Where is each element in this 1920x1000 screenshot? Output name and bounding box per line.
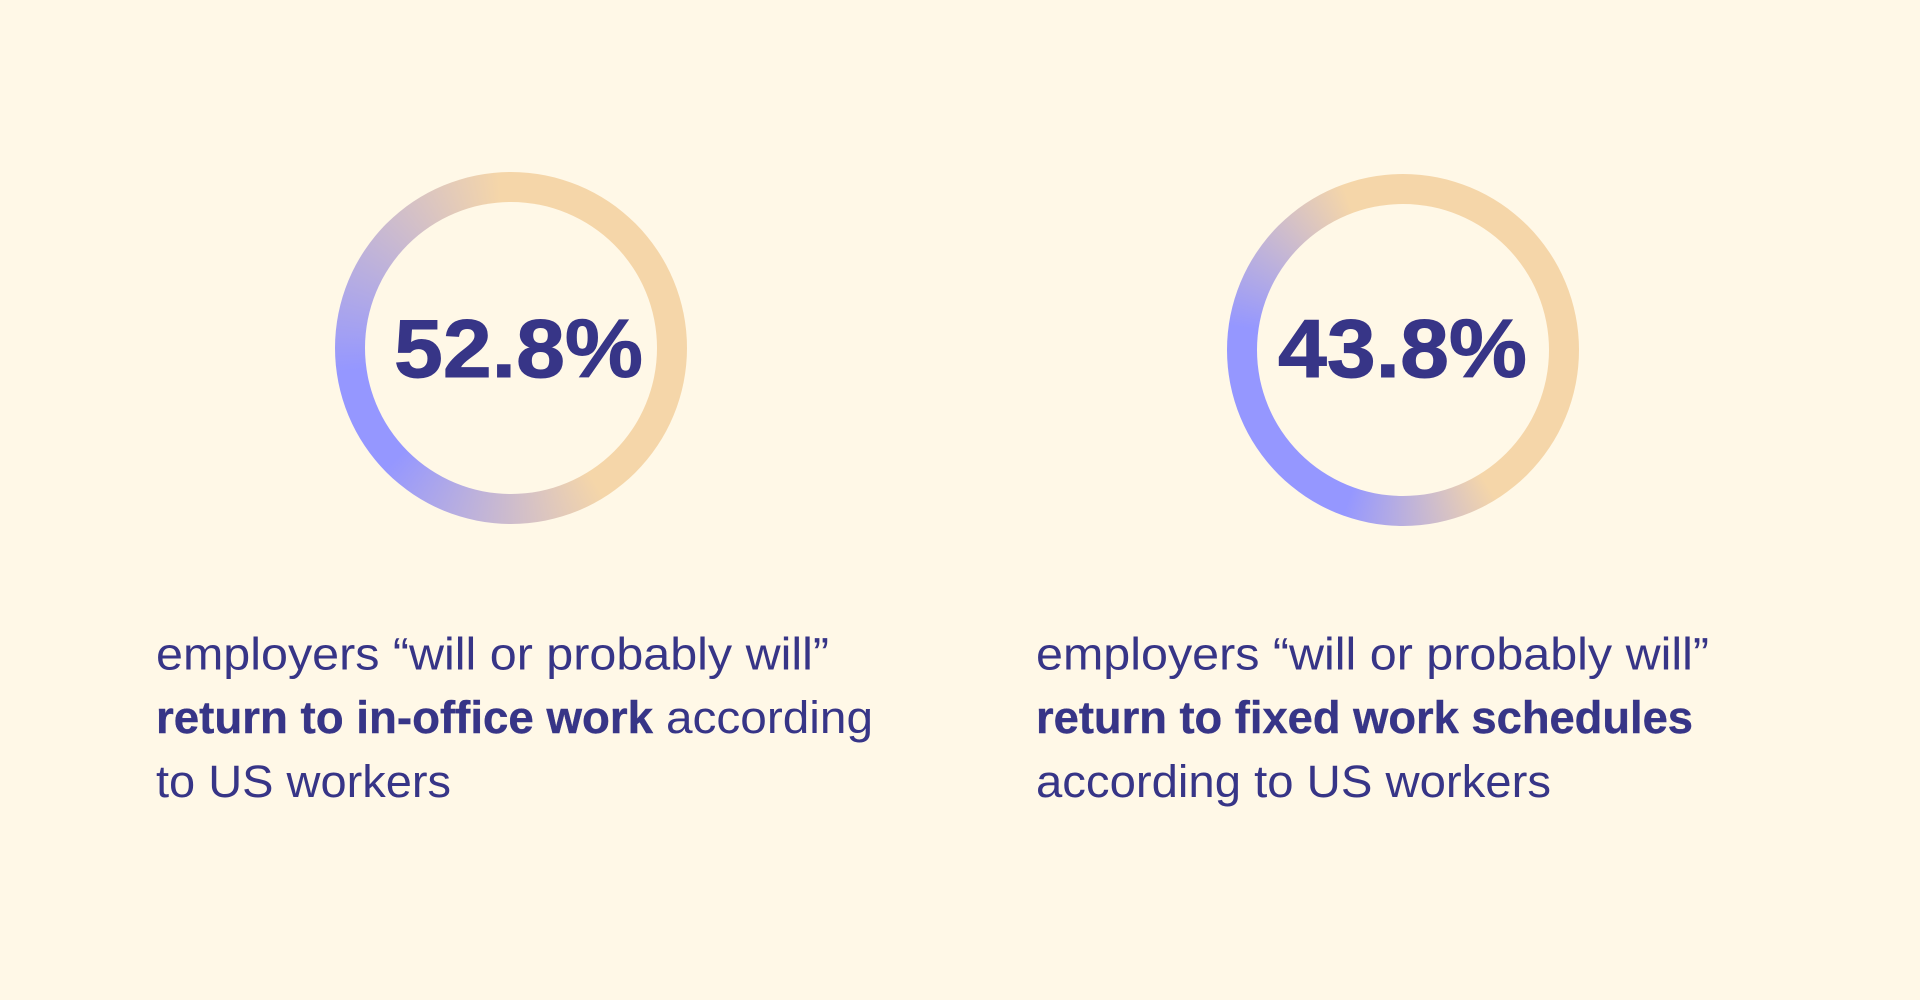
text block: in-office work: employers “will or probably will” bbox=[156, 628, 829, 680]
text block: in-office work: to US workers bbox=[156, 756, 451, 807]
text block: in-office work bbox=[156, 628, 873, 807]
value: 52.8%: 52.8% bbox=[394, 302, 643, 395]
text block: in-office work: return to in-office work bbox=[156, 692, 654, 743]
ring chart: 43.8% bbox=[1227, 174, 1579, 526]
text block: fixed work schedules: according to US workers bbox=[1036, 756, 1551, 807]
text block: in-office work: according bbox=[666, 692, 873, 743]
text block: fixed work schedules: employers “will or probably will” bbox=[1036, 628, 1709, 680]
text block: fixed work schedules bbox=[1036, 628, 1709, 807]
value: 43.8%: 43.8% bbox=[1278, 302, 1527, 395]
ring chart: 52.8% bbox=[335, 172, 687, 524]
text block: fixed work schedules: return to fixed work schedules bbox=[1036, 692, 1693, 743]
